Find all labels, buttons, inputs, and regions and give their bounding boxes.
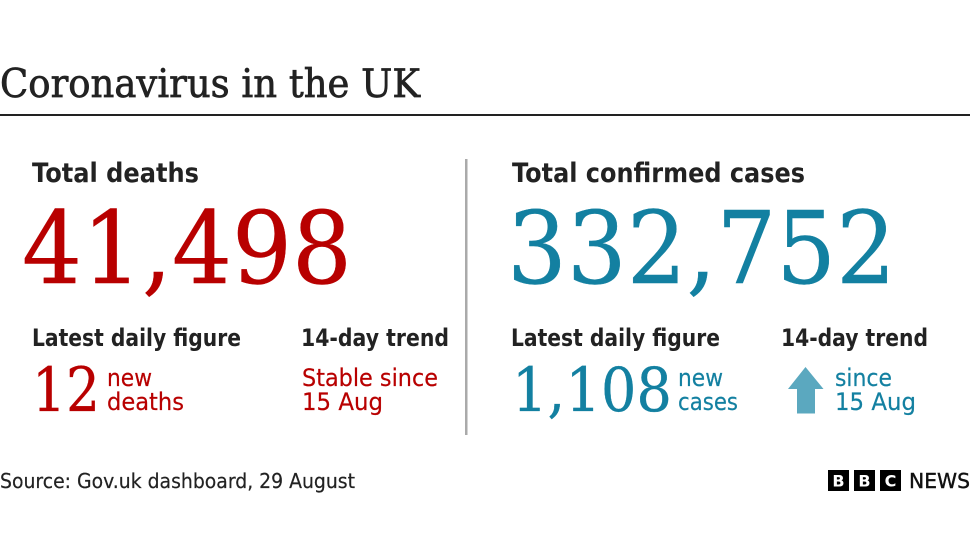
number: daily cases: 1,108 <box>512 355 672 426</box>
subheading: 14-day trend: 14-day trend <box>301 324 449 352</box>
heading: total confirmed cases: Total confirmed cases <box>512 158 805 189</box>
logo: BBC News: B <box>858 472 871 490</box>
number: daily deaths: 12 <box>32 355 100 426</box>
icon: up arrow <box>788 367 824 414</box>
label: new cases: cases <box>678 388 738 416</box>
source: Source: Gov.uk dashboard, 29 August <box>0 469 355 493</box>
logo: BBC News: NEWS <box>909 469 970 493</box>
label: stable since 15 Aug <box>302 364 438 416</box>
subheading: latest daily figure: Latest daily figure <box>511 324 720 352</box>
label: since 15 Aug: 15 Aug <box>835 388 916 416</box>
subheading: latest daily figure: Latest daily figure <box>32 324 241 352</box>
label: new deaths: new <box>107 364 152 392</box>
label: stable since 15 Aug: Stable since <box>302 364 438 392</box>
number: total deaths: 41,498 <box>22 190 352 307</box>
label: new deaths: deaths <box>107 388 184 416</box>
label: new cases: new <box>678 364 723 392</box>
subheading: 14-day trend: 14-day trend <box>781 324 928 352</box>
logo: BBC News <box>828 469 970 493</box>
logo: BBC News: C <box>885 472 896 490</box>
divider <box>465 159 468 435</box>
logo: BBC News: B <box>832 472 845 490</box>
title: Coronavirus in the UK <box>0 62 421 107</box>
label: new deaths <box>107 364 184 416</box>
panel: total deaths <box>22 158 449 426</box>
heading: total deaths: Total deaths <box>32 158 199 189</box>
label: since 15 Aug: since <box>835 364 892 392</box>
number: total cases: 332,752 <box>507 190 896 307</box>
label: new cases <box>678 364 738 416</box>
label: since 15 Aug <box>835 364 916 416</box>
label: stable since 15 Aug: 15 Aug <box>302 388 383 416</box>
panel: total confirmed cases <box>507 158 928 426</box>
